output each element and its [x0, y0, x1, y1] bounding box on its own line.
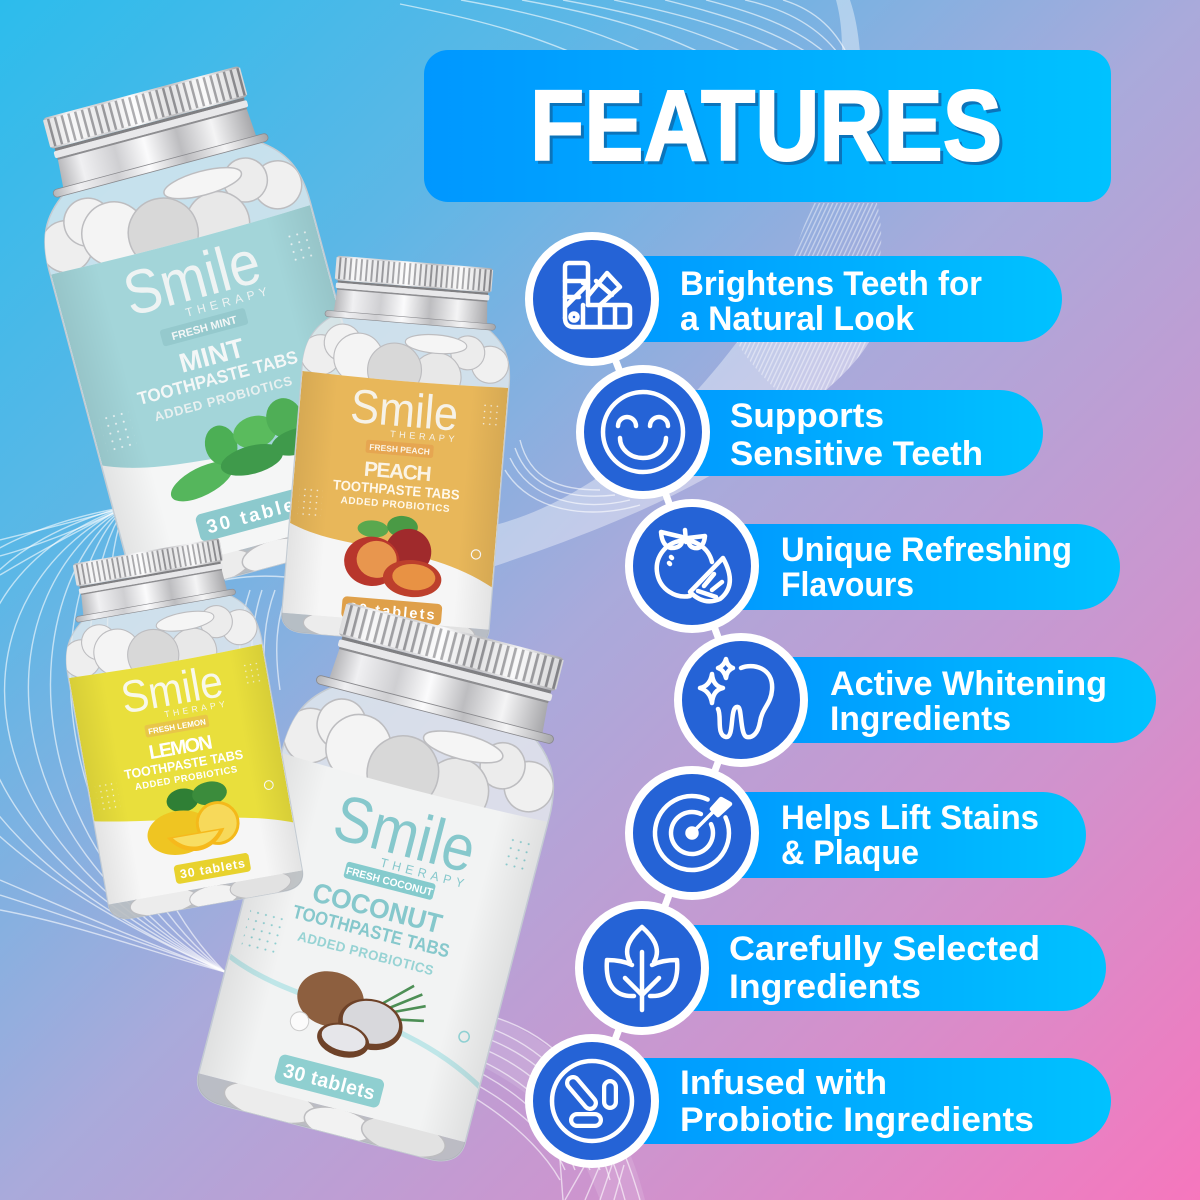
bottle: peach: FRESH PEACH [369, 442, 430, 457]
feature 7: Probiotic Ingredients [680, 1101, 1034, 1139]
feature 7 [529, 1038, 1111, 1164]
icon: sparkling tooth [700, 659, 772, 737]
feature 1: a Natural Look [680, 300, 914, 338]
bottle: peach [281, 256, 510, 638]
title heading: FEATURES [530, 70, 1002, 182]
bottle: coconut: ADDED PROBIOTICS [296, 929, 435, 978]
bottle: lemon: FRESH LEMON [147, 717, 207, 736]
icon: fruit and citrus slice [657, 530, 730, 601]
coconut fruit [285, 958, 432, 1075]
bottle: peach: ADDED PROBIOTICS [340, 495, 450, 515]
bottle: peach: PEACH [363, 458, 432, 486]
lemon fruit [140, 778, 244, 860]
bottle: lemon: LEMON [147, 731, 214, 764]
feature 1 [529, 236, 1062, 362]
bottle: coconut: TOOTHPASTE TABS [291, 901, 452, 962]
mint label [51, 205, 342, 554]
mint leaves [151, 389, 335, 511]
bottle: mint: THERAPY [184, 284, 269, 320]
icon: smiling face [603, 392, 683, 472]
bottle: lemon: THERAPY [164, 699, 226, 719]
bottle: coconut: Smile [327, 780, 483, 887]
peach label [281, 369, 510, 631]
bottle: mint [43, 66, 344, 580]
bottle: mint: Smile [116, 227, 268, 330]
bottle: lemon: 30 tablets [179, 856, 246, 881]
feature 2 text: Supports [730, 397, 884, 435]
bottle: lemon [66, 538, 304, 920]
bottle: coconut: THERAPY [379, 855, 465, 891]
bottle: coconut: FRESH COCONUT [345, 866, 434, 899]
bottle: mint: TOOTHPASTE TABS [135, 347, 300, 409]
left concentric line fan [0, 507, 310, 972]
coconut label [197, 750, 550, 1145]
feature 3 [629, 503, 1120, 629]
icon: leaf plant [607, 927, 677, 1010]
feature 6 [579, 905, 1106, 1031]
feature 5 text: Helps Lift Stains [781, 799, 1039, 837]
bottle: mint: MINT [176, 333, 248, 379]
feature 3 text: Unique Refreshing [781, 531, 1072, 569]
bottle: coconut: 30 tablets [281, 1060, 377, 1105]
bottle: peach: THERAPY [390, 429, 455, 444]
bottle: mint: FRESH MINT [170, 314, 239, 343]
icon: target with arrow [655, 796, 730, 870]
feature 2: Sensitive Teeth [730, 435, 983, 473]
icon: colour swatch [565, 263, 630, 327]
feature 3: Flavours [781, 566, 914, 604]
feature 6 text: Carefully Selected [729, 930, 1040, 968]
feature 1 text: Brightens Teeth for [680, 265, 982, 303]
bottle: mint: 30 tablets [204, 489, 318, 538]
feature 5: & Plaque [781, 834, 919, 872]
bottle: coconut: COCONUT [309, 877, 446, 940]
feature 5 [629, 770, 1086, 896]
title panel [424, 50, 1111, 202]
feature 2 [580, 369, 1043, 495]
bottle: lemon: Smile [117, 655, 227, 723]
bottle: peach: TOOTHPASTE TABS [332, 476, 460, 503]
feature 6: Ingredients [729, 968, 921, 1006]
background wave lines [0, 0, 881, 1200]
lemon label [67, 642, 303, 906]
bottle: lemon: ADDED PROBIOTICS [134, 764, 238, 793]
lower right line fan [450, 1015, 645, 1200]
bottle: peach: Smile [348, 380, 460, 442]
bottle: lemon: TOOTHPASTE TABS [123, 747, 244, 782]
bottle: mint: ADDED PROBIOTICS [153, 373, 294, 424]
bottle: coconut [197, 602, 564, 1162]
bottle: peach: 30 tablets [348, 601, 435, 624]
feature 4 text: Active Whitening [830, 665, 1107, 703]
feature 4: Ingredients [830, 700, 1011, 738]
connector line between icons [592, 299, 741, 1101]
feature 4 [678, 637, 1156, 763]
icon: probiotic bacteria [552, 1061, 632, 1141]
feature 7 text: Infused with [680, 1064, 887, 1102]
peach fruit [342, 511, 446, 599]
